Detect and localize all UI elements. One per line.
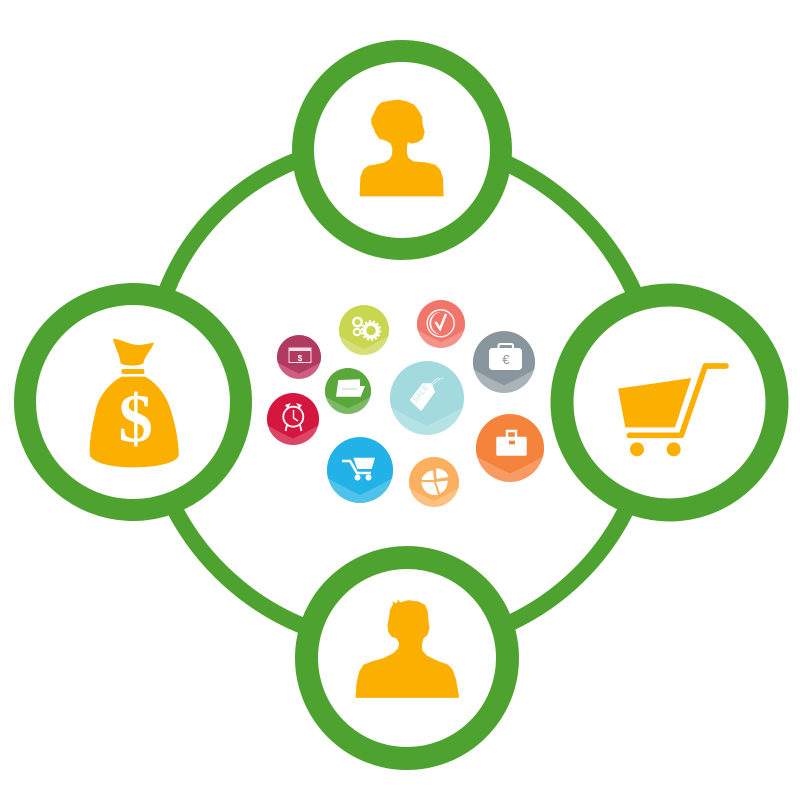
- badge: euro case: €: [502, 352, 510, 367]
- badge: sale tag: [390, 361, 464, 435]
- icon: man silhouette: [356, 600, 459, 698]
- badge: pie chart: [409, 457, 459, 507]
- badge: shopping cart: [327, 437, 393, 503]
- badge: gears: [339, 305, 389, 355]
- badge: euro case: [473, 331, 535, 393]
- icon: money bag: [90, 339, 179, 467]
- badge: check dial: [417, 300, 465, 348]
- badge: credit card: [277, 335, 321, 379]
- icon: money bag: $: [118, 380, 153, 456]
- badge: sale tag: SALE: [411, 383, 431, 404]
- node: cart: [562, 295, 777, 510]
- node: man: [306, 558, 508, 758]
- badge: briefcase: [476, 414, 544, 482]
- node: woman: [303, 51, 501, 249]
- badge: credit card: $: [298, 354, 303, 363]
- node: money: [25, 294, 241, 510]
- icon: shopping cart: [618, 366, 726, 456]
- connecting ring: [166, 160, 634, 626]
- icon: woman silhouette: [360, 100, 443, 196]
- badge: folder: [325, 368, 371, 414]
- badge: alarm clock: [267, 393, 319, 445]
